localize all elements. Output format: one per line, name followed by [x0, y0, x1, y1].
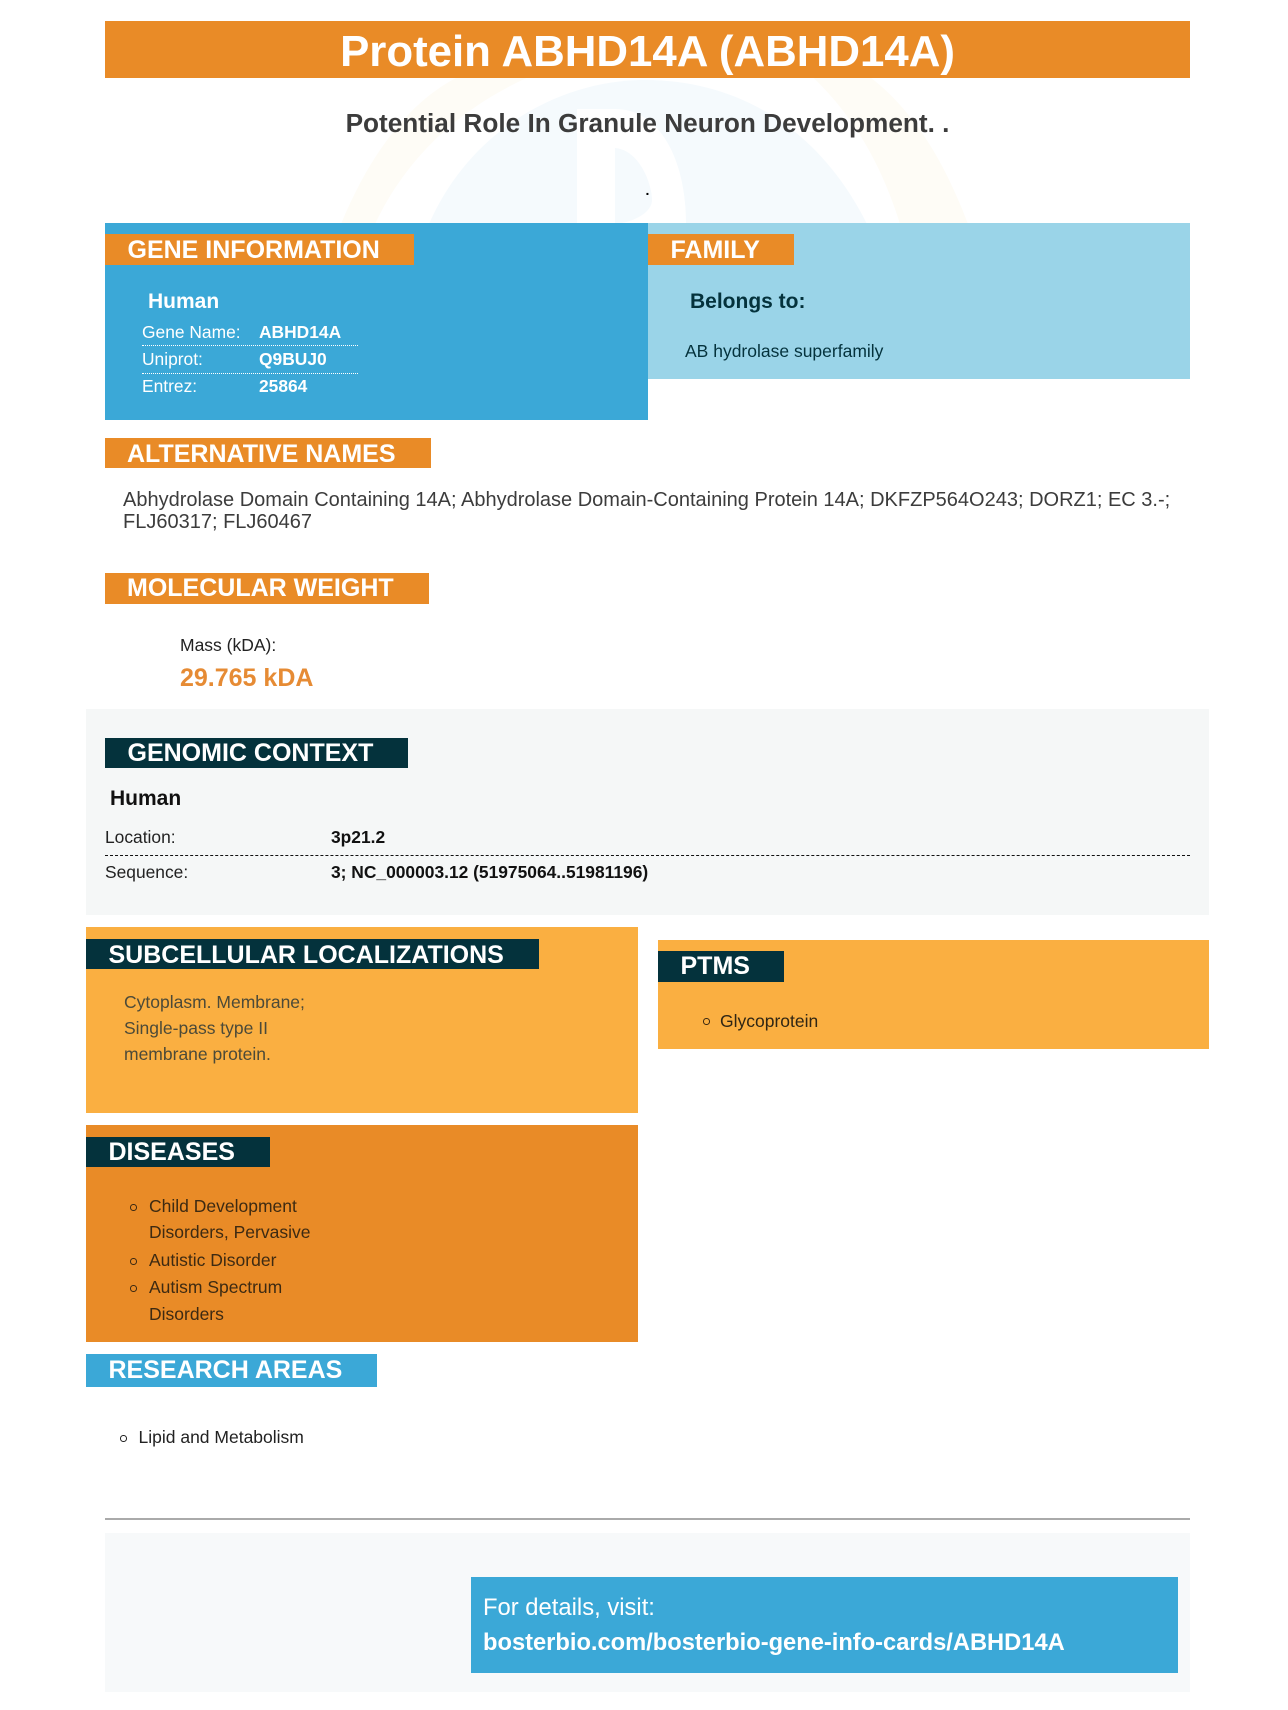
disease item 2: Autistic Disorder [149, 1250, 276, 1270]
heading: family [648, 234, 794, 265]
sequence row [105, 862, 648, 882]
uniprot row: Q9BUJ0 [259, 349, 327, 369]
location row: 3p21.2 [331, 827, 385, 847]
subtitle: Potential Role In Granule Neuron Development. . [346, 108, 949, 138]
localization text: Cytoplasm. Membrane; [124, 992, 305, 1012]
footer rule [105, 1518, 1190, 1520]
disease bullet 2 [130, 1258, 136, 1264]
disease item 3 [149, 1277, 282, 1324]
heading: ptms [658, 951, 784, 982]
callout: details link [471, 1577, 1178, 1673]
localization text: Single-pass type II [124, 1018, 268, 1038]
heading: molecular weight: MOLECULAR WEIGHT [127, 574, 394, 602]
location row [105, 821, 1190, 856]
belongs to label: Belongs to: [690, 290, 806, 313]
heading: alternative names: ALTERNATIVE NAMES [127, 440, 396, 468]
disease item 1: Disorders, Pervasive [149, 1222, 310, 1242]
species label: Human [110, 787, 181, 810]
localization text [124, 992, 305, 1064]
heading: subcellular localizations: SUBCELLULAR LOCALIZATIONS [108, 941, 504, 969]
species label: Human [148, 290, 219, 313]
panel: diseases [86, 1125, 638, 1342]
alternative names text: FLJ60317; FLJ60467 [123, 511, 312, 533]
disease item 1: Child Development [149, 1196, 297, 1216]
ptm bullet [703, 1018, 710, 1024]
ptm item: Glycoprotein [720, 1011, 818, 1031]
mass label: Mass (kDA): [180, 635, 276, 655]
watermark logo [342, 78, 968, 223]
disease item 3: Disorders [149, 1304, 224, 1324]
uniprot row [142, 346, 358, 374]
uniprot row: Uniprot: [142, 349, 203, 369]
title banner: Protein ABHD14A (ABHD14A) [340, 27, 955, 76]
mass value: 29.765 kDA [180, 664, 313, 692]
disease item 1 [149, 1196, 310, 1242]
family value: AB hydrolase superfamily [685, 341, 883, 361]
sequence row: Sequence: [105, 862, 188, 882]
entrez row [142, 376, 308, 396]
entrez row: 25864 [259, 376, 307, 396]
panel: ptms [658, 940, 1209, 1049]
title banner [105, 21, 1190, 78]
sequence row: 3; NC_000003.12 (51975064..51981196) [331, 862, 648, 882]
alternative names text: Abhydrolase Domain Containing 14A; Abhydrolase Domain-Containing Protein 14A; DKFZP564O243; DORZ1; EC 3.-; [123, 489, 1170, 511]
heading: diseases: DISEASES [108, 1138, 235, 1166]
callout url: bosterbio.com/bosterbio-gene-info-cards/ABHD14A [483, 1630, 1065, 1656]
gene name row [142, 318, 358, 346]
entrez row: Entrez: [142, 376, 197, 396]
dot text: . [646, 182, 649, 198]
panel: subcellular localizations [86, 927, 638, 1113]
research item: Lipid and Metabolism [138, 1427, 304, 1447]
disease bullet 3 [130, 1285, 136, 1292]
panel: genomic context [86, 709, 1209, 915]
heading: gene information: GENE INFORMATION [128, 236, 380, 264]
disease bullet 1 [130, 1204, 136, 1210]
heading: family: FAMILY [670, 236, 760, 264]
panel: footer [105, 1533, 1190, 1692]
heading: research areas: RESEARCH AREAS [108, 1356, 342, 1384]
heading: diseases [86, 1137, 270, 1167]
heading: genomic context: GENOMIC CONTEXT [128, 739, 373, 767]
heading: research areas [86, 1354, 377, 1387]
disease item 3: Autism Spectrum [149, 1277, 282, 1297]
location row: Location: [105, 827, 176, 847]
localization text: membrane protein. [124, 1044, 271, 1064]
heading: ptms: PTMS [680, 952, 750, 980]
gene name row: ABHD14A [259, 322, 341, 342]
gene name row: Gene Name: [142, 322, 241, 342]
callout label: For details, visit: [483, 1594, 655, 1621]
panel: gene information [105, 223, 648, 420]
research bullet [120, 1435, 126, 1442]
alternative names text [123, 489, 1170, 533]
panel: family [648, 223, 1190, 379]
